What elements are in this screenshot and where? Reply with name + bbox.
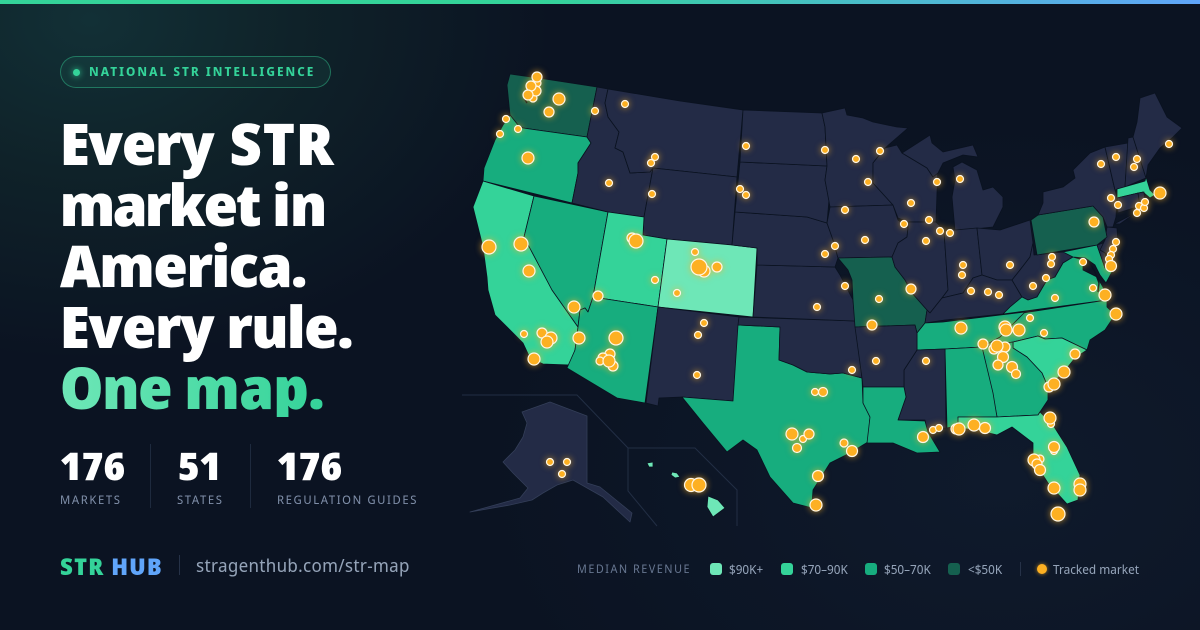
state: MI upper [902, 135, 978, 177]
state: VT [1105, 143, 1128, 190]
state: NY Long Island [1114, 212, 1137, 224]
state: CO [658, 239, 757, 317]
state: AZ [567, 297, 658, 403]
headline [60, 103, 352, 426]
headline accent: One map. [60, 347, 324, 426]
state: CA [473, 181, 578, 365]
brand logo: STR HUB [60, 550, 163, 582]
legend title: MEDIAN REVENUE [577, 562, 691, 577]
state: MO [838, 257, 927, 333]
state: WA [507, 74, 597, 137]
inset frames [462, 395, 737, 526]
state: MN [822, 108, 908, 207]
state: WY [643, 168, 737, 245]
stat: markets [60, 440, 125, 508]
state: IL [892, 222, 948, 313]
state: SC [1013, 336, 1087, 387]
state: UT [593, 212, 667, 307]
state: NJ [1100, 227, 1118, 257]
stat label: STATES [177, 491, 224, 508]
stat: states [150, 444, 251, 508]
state: MD [1063, 245, 1113, 283]
state: NH [1125, 137, 1146, 187]
state: HI Maui [671, 472, 680, 478]
legend swatch: $70–90K [781, 563, 793, 575]
state: NE [732, 212, 838, 267]
legend label: $50–70K: $50–70K [884, 561, 931, 578]
state: FL [958, 412, 1080, 504]
state: NM [646, 307, 739, 406]
badge: national STR intelligence [60, 56, 331, 88]
legend swatch: $90K+ [710, 563, 722, 575]
state: RI [1138, 192, 1145, 206]
state: OH [977, 220, 1033, 280]
state: OK [738, 317, 862, 378]
state: WI [873, 145, 938, 222]
legend [577, 561, 1139, 578]
legend label: $90K+: $90K+ [729, 561, 763, 578]
headline: Every STR [60, 103, 334, 182]
legend label: <$50K: <$50K [968, 561, 1002, 578]
state: ND [740, 110, 827, 166]
state: GA [982, 342, 1048, 417]
state: SD [735, 162, 829, 223]
state: NY [1038, 147, 1117, 227]
state: TX [682, 325, 870, 510]
states [470, 74, 1182, 522]
badge text: NATIONAL STR INTELLIGENCE [89, 63, 315, 80]
state: HI Kauai [647, 462, 653, 467]
legend swatch: <$50K [948, 563, 960, 575]
state: KS [753, 265, 855, 321]
headline: America. [60, 225, 306, 304]
legend swatch: $50–70K [865, 563, 877, 575]
stat number: 176 [277, 440, 342, 492]
footer divider [179, 555, 180, 575]
headline: Every rule. [60, 286, 352, 365]
state: KY [925, 275, 1022, 323]
url: stragenthub.com/str-map [196, 554, 410, 578]
stat label: MARKETS [60, 491, 122, 508]
state: IN [942, 228, 982, 298]
stat label: REGULATION GUIDES [277, 491, 418, 508]
state: AL [945, 347, 997, 428]
state: PA [1031, 206, 1107, 255]
state: MA [1117, 177, 1155, 198]
state: AR [855, 325, 917, 387]
state: WV [1012, 243, 1073, 300]
state: LA [863, 387, 940, 453]
state: AK [470, 402, 632, 522]
state: IA [827, 205, 908, 258]
stat: regulation guides [250, 444, 421, 508]
state: HI big island [707, 496, 725, 517]
headline: market in [60, 164, 327, 243]
state: DE [1097, 243, 1110, 268]
tracked markets [482, 72, 1172, 521]
state: MS [898, 349, 946, 430]
state: TN [917, 312, 1025, 350]
legend dot: tracked market [1037, 564, 1047, 574]
stat number: 176 [60, 440, 125, 492]
state: CT [1117, 193, 1140, 213]
state: MT [605, 89, 743, 177]
stat number: 51 [178, 440, 221, 492]
state: MI lower [952, 162, 1003, 231]
legend label: $70–90K: $70–90K [801, 561, 848, 578]
state: ME [1133, 93, 1182, 178]
state: ID [572, 87, 653, 217]
state: VA [1003, 257, 1107, 314]
state: OR [483, 115, 591, 203]
legend label: tracked market: Tracked market [1053, 561, 1139, 578]
state: NV [524, 196, 608, 327]
legend divider [1020, 562, 1021, 576]
state: NC [982, 300, 1115, 350]
top accent bar [0, 0, 1200, 4]
badge dot [73, 69, 80, 76]
